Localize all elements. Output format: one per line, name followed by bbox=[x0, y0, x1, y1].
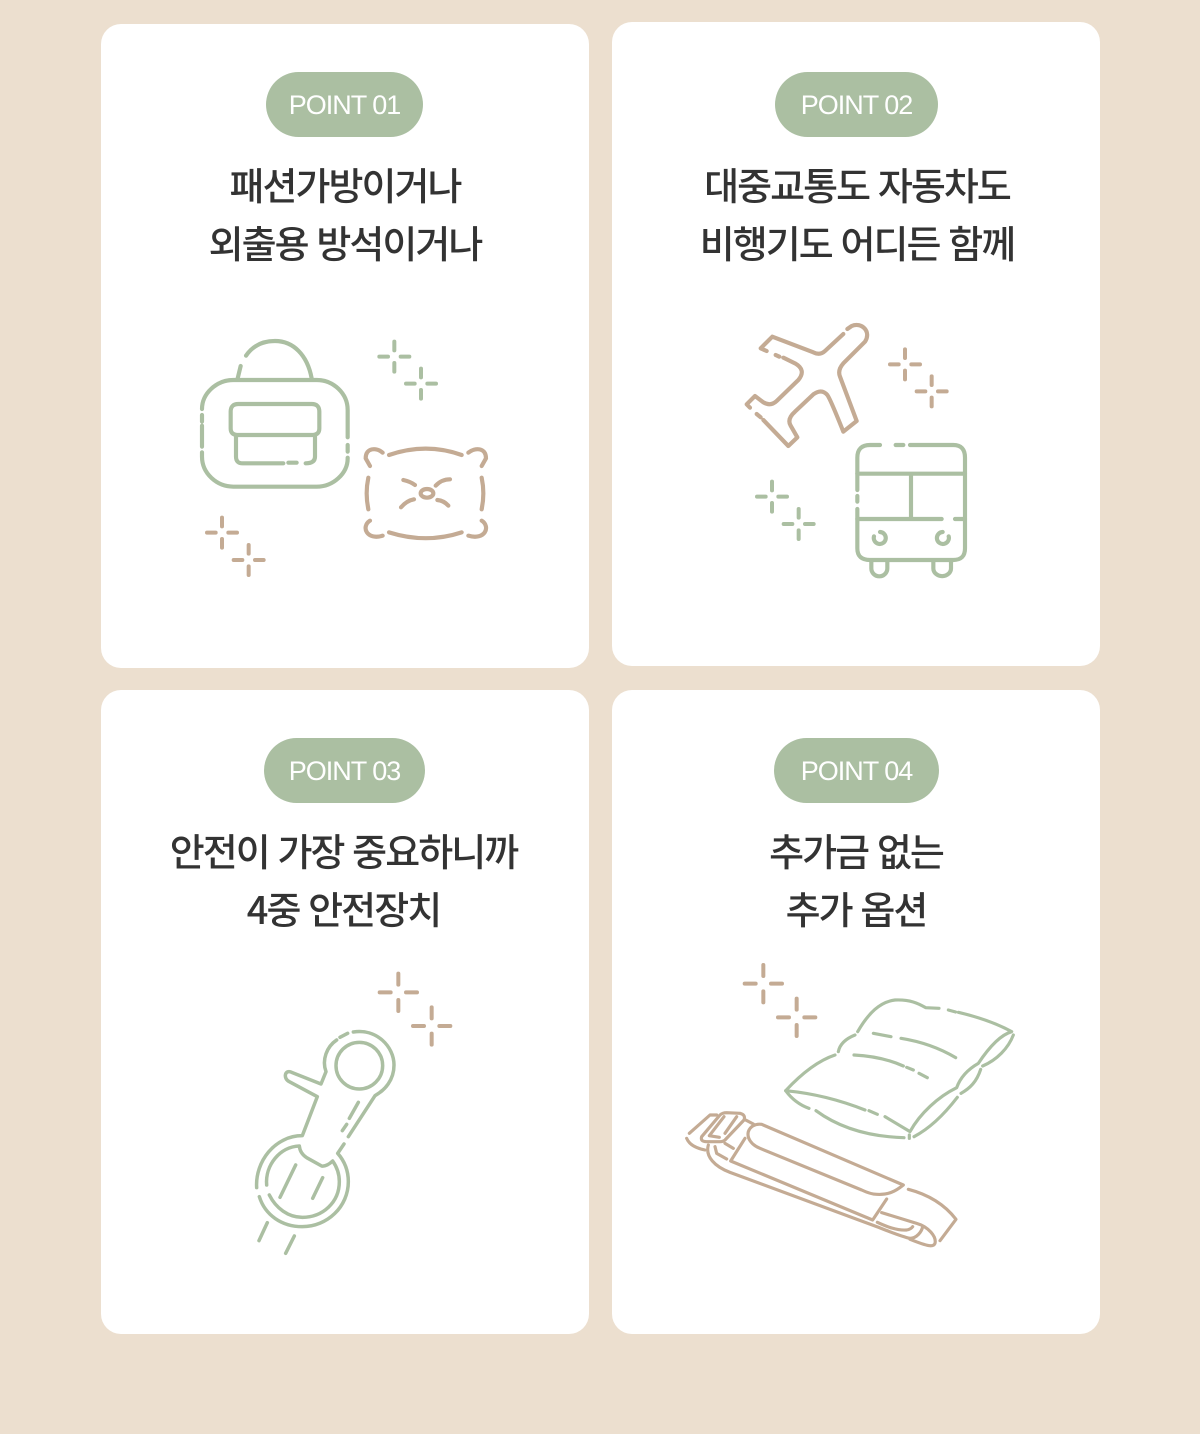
icon: green sparkles bbox=[379, 342, 436, 399]
badge: POINT 01: POINT 01 bbox=[289, 90, 400, 120]
heading: point 02 bbox=[700, 156, 1014, 269]
icon: pillow bbox=[786, 1000, 1013, 1138]
icon: tan sparkles bbox=[207, 518, 264, 575]
heading: point 04 bbox=[769, 822, 944, 935]
badge: POINT 04 bbox=[774, 738, 939, 803]
icon: airplane bbox=[747, 325, 867, 446]
icon: bus bbox=[857, 445, 965, 576]
illustration: plane and bus bbox=[744, 322, 968, 578]
heading: point 03 bbox=[170, 822, 518, 935]
heading: point 01 bbox=[209, 156, 482, 269]
icon: tan sparkles bbox=[745, 965, 815, 1036]
badge: POINT 02 bbox=[775, 72, 938, 137]
badge: POINT 01 bbox=[266, 72, 423, 137]
badge: POINT 04: POINT 04 bbox=[801, 756, 912, 786]
heading: point 02: 대중교통도 자동차도 bbox=[704, 156, 1010, 211]
badge: POINT 02: POINT 02 bbox=[801, 90, 912, 120]
panel: point 04 bbox=[612, 690, 1100, 1334]
heading: point 04: 추가 옵션 bbox=[786, 880, 926, 935]
panel: point 01 bbox=[101, 24, 589, 668]
badge: POINT 03: POINT 03 bbox=[289, 756, 400, 786]
illustration: safety key bbox=[254, 972, 452, 1256]
icon: bag bbox=[202, 341, 348, 487]
heading: point 02: 비행기도 어디든 함께 bbox=[700, 214, 1014, 269]
icon: safety key bbox=[257, 1032, 394, 1253]
icon: cushion bbox=[366, 449, 486, 538]
illustration: bag and cushion bbox=[200, 338, 488, 577]
heading: point 01: 패션가방이거나 bbox=[229, 156, 461, 211]
heading: point 04: 추가금 없는 bbox=[769, 822, 943, 877]
heading: point 03: 안전이 가장 중요하니까 bbox=[170, 822, 517, 877]
icon: tan sparkles bbox=[380, 974, 450, 1045]
icon: tan sparkles bbox=[890, 349, 947, 406]
icon: strap bbox=[687, 1113, 956, 1246]
badge: POINT 03 bbox=[264, 738, 425, 803]
illustration: pillow and strap bbox=[685, 963, 1015, 1248]
heading: point 03: 4중 안전장치 bbox=[247, 880, 440, 935]
icon: green sparkles bbox=[757, 482, 814, 539]
panel: point 02 bbox=[612, 22, 1100, 666]
panel: point 03 bbox=[101, 690, 589, 1334]
heading: point 01: 외출용 방석이거나 bbox=[209, 214, 481, 269]
